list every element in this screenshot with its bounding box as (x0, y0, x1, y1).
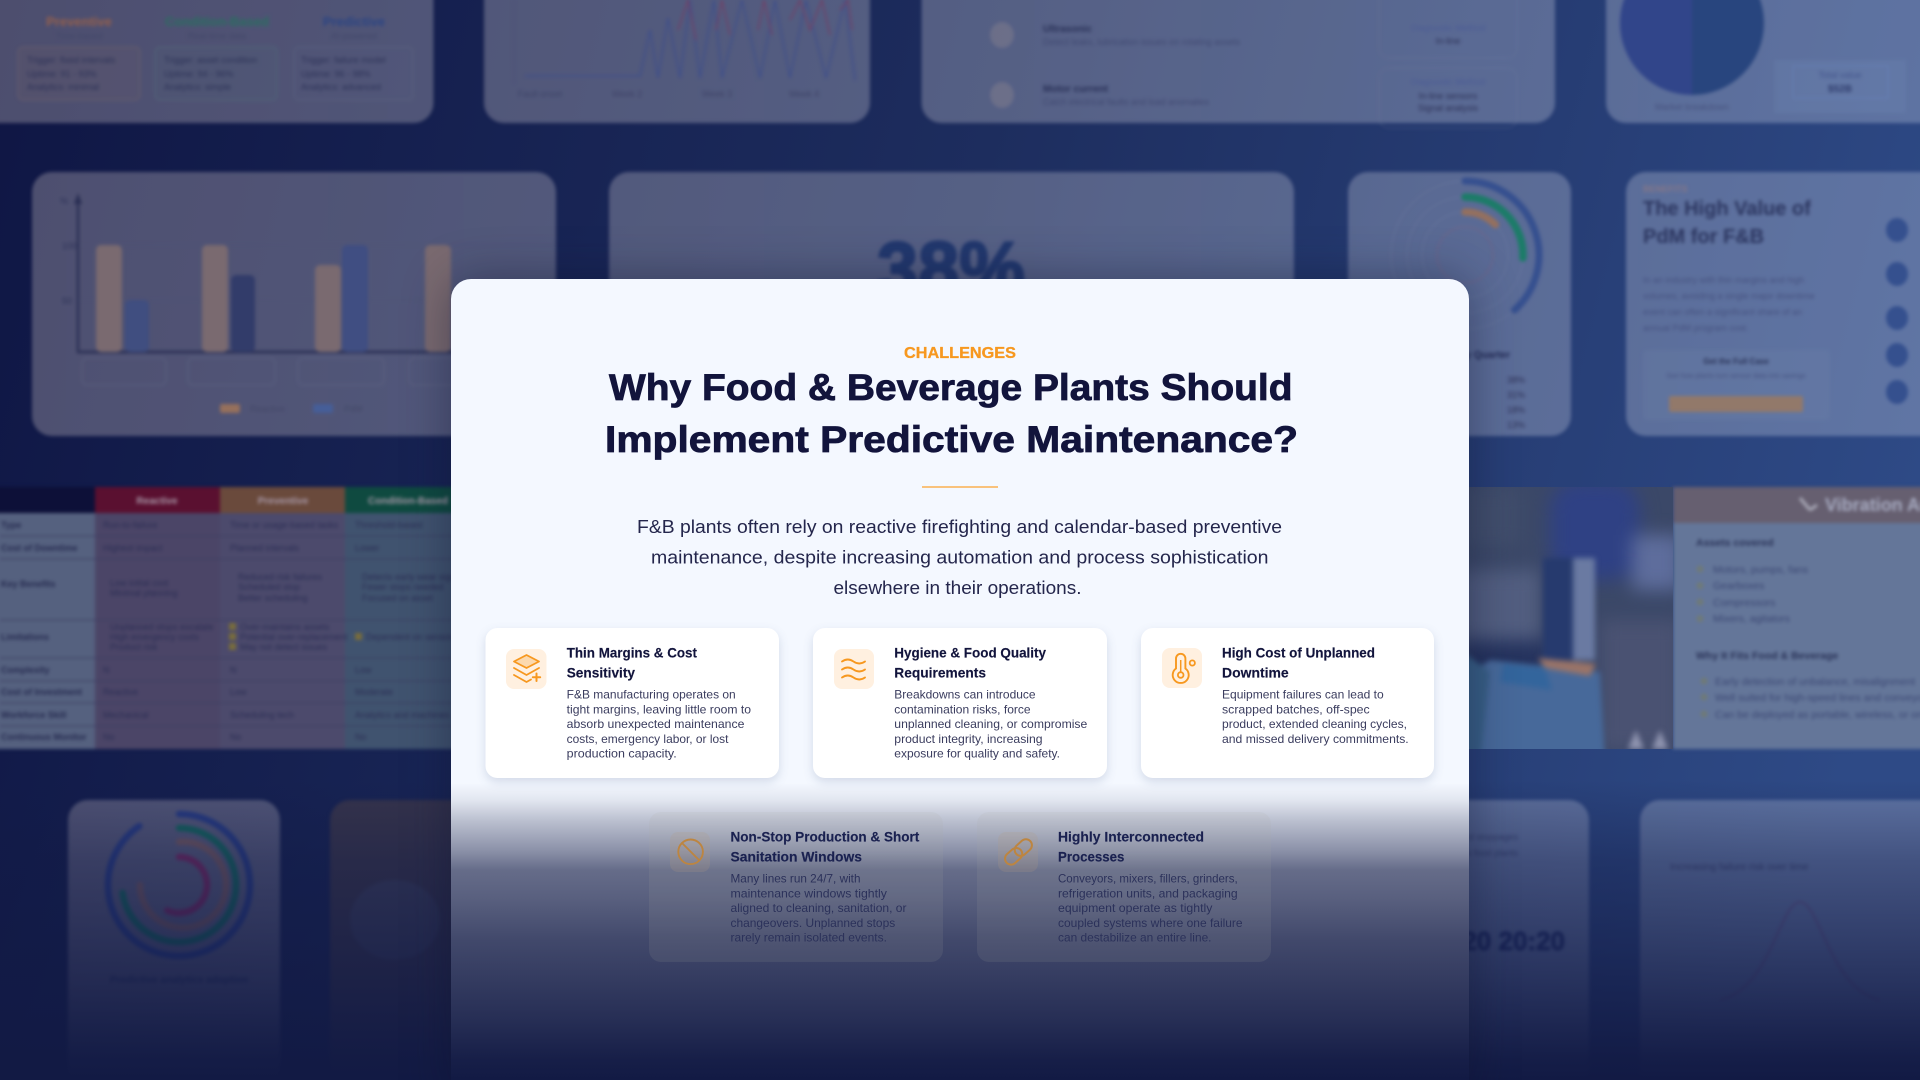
panel: maintenance strategies: Real-time data (188, 31, 246, 41)
card: thin margins: absorb unexpected maintenance (567, 717, 745, 731)
panel: timers: across food plants (1445, 848, 1518, 858)
card: non-stop production: changeovers. Unplanned stops (730, 916, 895, 930)
section eyebrow: CHALLENGES (904, 345, 1016, 362)
panel: high value of PdM: event can often a significant share of an (1643, 307, 1802, 317)
card: interconnected processes: coupled systems where one failure (1058, 916, 1243, 930)
panel: comparison table: Mechanical (103, 710, 149, 720)
panel: blurred photo of technician (1469, 487, 1673, 749)
panel: pie chart: Market breakdown (1655, 102, 1729, 112)
card: non-stop production: Sanitation Windows (730, 848, 862, 864)
panel: comparison table: May not detect issues (240, 642, 328, 652)
card: thin margins: production capacity. (567, 746, 677, 760)
panel: comparison table: No (103, 732, 115, 742)
card: thin margins: F&B manufacturing operates on (567, 688, 736, 702)
panel: bar chart (32, 172, 556, 436)
panel: maintenance strategies: Analytics: minimal (27, 82, 99, 92)
panel: maintenance strategies: Time-based (55, 31, 103, 41)
panel: techniques list: Diagnostic Method (1411, 77, 1485, 87)
panel: bar chart: 50 (62, 296, 72, 306)
panel: pie chart: $52B (1828, 84, 1852, 95)
main heading: Why Food & Beverage Plants Should (609, 367, 1292, 408)
panel: comparison table: Fewer stops needed (362, 582, 444, 592)
panel: comparison table: Analytics and machines (355, 710, 450, 720)
heading divider (922, 486, 998, 488)
panel: bar chart: 100 (62, 241, 77, 251)
panel: comparison table: Dependent on sensors (366, 632, 457, 642)
panel: pie chart: Total value (1818, 70, 1862, 80)
panel: timers: 20:20 20:20 (1425, 926, 1565, 956)
panel: sensor line chart: Week 4 (789, 89, 819, 99)
panel: techniques list: In-line (1436, 36, 1460, 46)
card: interconnected processes: Processes (1058, 848, 1125, 864)
panel: maintenance strategies: Uptime: 91 - 93% (27, 69, 97, 79)
panel: maintenance strategies: Preventive (46, 14, 112, 29)
panel: comparison table: Low (355, 665, 372, 675)
panel: radial chart: 18% (1507, 405, 1525, 415)
card: interconnected processes: equipment operate as tightly (1058, 901, 1212, 915)
card: hygiene: product integrity, increasing (894, 732, 1043, 746)
icon: layers (506, 649, 546, 689)
icon: waves (834, 649, 874, 689)
icon: thermometer (1162, 648, 1202, 688)
panel: comparison table: Continuous Monitor (1, 732, 87, 742)
card: hygiene: Requirements (894, 664, 986, 680)
panel: pie chart (1606, 0, 1920, 123)
panel: blurred photo, lower left (330, 800, 470, 1080)
card: non-stop production: rarely remain isolated events. (730, 930, 887, 944)
panel: maintenance strategies: Trigger: asset condition (164, 55, 257, 65)
panel: timers (1400, 800, 1589, 1080)
card: thin margins: tight margins, leaving little room to (567, 702, 751, 716)
card: hygiene: Hygiene & Food Quality (894, 645, 1046, 661)
panel: comparison table: Detects early wear signals (362, 572, 468, 582)
panel: comparison table: Limitations (1, 632, 49, 642)
panel: high value of PdM: BENEFITS (1643, 184, 1688, 194)
panel: comparison table: High emergency costs (110, 632, 200, 642)
card: non-stop production (649, 812, 943, 962)
panel: comparison table (0, 487, 468, 749)
panel: comparison table: Unplanned stops escalate (110, 622, 214, 632)
panel: high value of PdM: In an industry with thin margins and high (1643, 275, 1804, 285)
panel: sensor line chart: Week 3 (702, 89, 732, 99)
card: downtime cost: High Cost of Unplanned (1222, 645, 1375, 661)
card: downtime cost: and missed delivery commitments. (1222, 732, 1409, 746)
panel: techniques list: Motor current (1043, 84, 1109, 95)
panel: maintenance strategies: Uptime: 94 - 96% (164, 69, 234, 79)
intro paragraph: maintenance, despite increasing automation and process sophistication (651, 546, 1268, 568)
card: non-stop production: Non-Stop Production & Short (730, 829, 920, 845)
panel: 38% stat: 38% (877, 227, 1025, 312)
panel: techniques list: Signal analysis (1418, 103, 1479, 113)
card: thin margins (486, 628, 779, 778)
card: downtime cost: Downtime (1222, 664, 1289, 680)
panel: comparison table: Lower (355, 543, 380, 553)
panel: comparison table: Planned intervals (230, 543, 300, 553)
card: thin margins: Thin Margins & Cost (567, 645, 697, 661)
panel: comparison table: Minimal planning (110, 588, 178, 598)
panel: comparison table: Time or usage-based tasks (230, 520, 339, 530)
intro paragraph: F&B plants often rely on reactive firefighting and calendar-based preventive (637, 516, 1282, 537)
panel: comparison table: N (230, 665, 236, 675)
panel: radial gauge: Predictive analytics adoption (110, 975, 248, 986)
panel: challenges modal (451, 279, 1469, 1080)
panel: comparison table: No (355, 732, 367, 742)
panel: comparison table: Key Benefits (1, 579, 56, 589)
panel: bar chart: PdM (344, 404, 363, 414)
panel: techniques list: Ultrasonic (1043, 24, 1092, 35)
card: downtime cost: Equipment failures can lead to (1222, 688, 1384, 702)
panel: maintenance strategies: Trigger: failure model (301, 55, 386, 65)
panel: maintenance strategies: Predictive (323, 14, 385, 29)
panel: radial chart (1348, 172, 1571, 436)
panel: high value of PdM: volumes, avoiding a single major downtime (1643, 291, 1815, 301)
panel: comparison table: Cost of Downtime (1, 543, 78, 553)
card: hygiene: Breakdowns can introduce (894, 688, 1036, 702)
panel: comparison table: Over-maintains assets (240, 622, 330, 632)
panel: comparison table: Preventive (258, 496, 309, 507)
panel: techniques list: Detect leaks, lubrication issues on rotating assets (1043, 37, 1241, 47)
card: interconnected processes: refrigeration units, and packaging (1058, 886, 1238, 900)
card: thin margins: Sensitivity (567, 664, 635, 680)
panel: bar chart: Reactive (250, 404, 285, 414)
panel: comparison table: No (230, 732, 242, 742)
card: hygiene: exposure for quality and safety. (894, 746, 1060, 760)
panel: bar chart: % (60, 196, 68, 206)
icon: prohibited (670, 832, 710, 872)
panel: vibration analysis: Mixers, agitators (1713, 613, 1790, 625)
panel: comparison table: Cost of Investment (1, 687, 82, 697)
panel: comparison table: Type (1, 520, 21, 530)
panel: maintenance strategies: AI-powered (331, 31, 377, 41)
card: thin margins: costs, emergency labor, or lost (567, 732, 729, 746)
card: hygiene: unplanned cleaning, or compromise (894, 717, 1088, 731)
panel: comparison table: Scheduling tech (230, 710, 294, 720)
panel: comparison table: Reduced risk failures (238, 572, 323, 582)
panel: high value of PdM: See how plants turn sensor data into savings (1666, 373, 1806, 380)
panel: radial chart: by Quarter (1459, 350, 1510, 361)
panel: bell curve: Increasing failure risk over time (1670, 862, 1809, 873)
modal fade overlay (451, 783, 1469, 1080)
panel: high value of PdM: Get the Full Case (1703, 357, 1769, 366)
panel: comparison table: Better scheduling (238, 593, 308, 603)
panel: high value of PdM: The High Value of (1643, 198, 1811, 220)
panel: vibration analysis: Assets covered (1696, 537, 1774, 549)
panel: comparison table: Condition-Based (368, 496, 448, 507)
panel: comparison table: Complexity (1, 665, 50, 675)
panel: comparison table: Low (230, 687, 247, 697)
panel: comparison table: Run-to-failure (103, 520, 158, 530)
panel: radial chart: 31% (1507, 390, 1525, 400)
panel: techniques list: Diagnostic Method (1411, 23, 1485, 33)
card: downtime cost (1141, 628, 1434, 778)
panel: vibration analysis: Motors, pumps, fans (1713, 564, 1808, 576)
panel: vibration analysis (1673, 487, 1920, 749)
panel: maintenance strategies: Trigger: fixed intervals (27, 55, 116, 65)
panel: maintenance strategies: Analytics: advanced (301, 82, 381, 92)
panel: vibration analysis: Gearboxes (1713, 580, 1764, 592)
panel: maintenance strategies: Analytics: simple (164, 82, 231, 92)
panel: 38% stat (609, 172, 1294, 436)
panel: comparison table: Workforce Skill (1, 710, 66, 720)
panel: maintenance strategies: Condition-Based (165, 14, 269, 29)
panel: high value of PdM: annual PdM program cost. (1643, 323, 1749, 333)
panel: techniques list: In-line sensors (1419, 91, 1478, 101)
panel: comparison table: Moderate (355, 687, 393, 697)
panel: maintenance strategies: Uptime: 96 - 98% (301, 69, 371, 79)
card: interconnected processes: can destabilize an entire line. (1058, 930, 1212, 944)
intro paragraph (637, 516, 1282, 598)
panel: timers: Unplanned stoppages (1430, 832, 1518, 842)
panel: radial gauge (68, 800, 280, 1080)
panel: comparison table: N (103, 665, 110, 675)
panel: techniques list (922, 0, 1555, 128)
card: non-stop production: maintenance windows tightly (730, 886, 887, 900)
panel: bell curve (1640, 800, 1920, 1080)
modal surface (451, 279, 1469, 1080)
main heading: Implement Predictive Maintenance? (605, 419, 1298, 460)
panel: maintenance strategies (0, 0, 434, 123)
card: interconnected processes: Conveyors, mixers, fillers, grinders, (1058, 872, 1238, 886)
background fade overlay (0, 770, 1920, 1080)
panel: sensor line chart: Fault onset (518, 89, 563, 99)
card: hygiene (813, 628, 1107, 778)
panel: techniques list: Catch electrical faults and load anomalies (1043, 97, 1210, 107)
card: non-stop production: Many lines run 24/7, with (730, 872, 860, 886)
card: interconnected processes (977, 812, 1271, 962)
panel: high value of PdM: PdM for F&B (1643, 226, 1764, 248)
panel: vibration analysis: Early detection of unbalance, misalignment (1715, 676, 1915, 688)
panel: vibration analysis: Compressors (1713, 597, 1775, 609)
panel: vibration analysis: Why It Fits Food & Beverage (1696, 650, 1839, 662)
panel: comparison table: Scheduled stop (238, 582, 300, 592)
main heading (605, 367, 1298, 460)
panel: comparison table: Product risk (110, 642, 158, 652)
panel: high value of PdM (1626, 172, 1920, 436)
intro paragraph: elsewhere in their operations. (834, 577, 1082, 598)
panel: radial chart: 38% (1507, 375, 1525, 385)
card: downtime cost: product, extended cleaning cycles, (1222, 717, 1407, 731)
panel: comparison table: Focused on asset (362, 593, 434, 603)
panel: sensor line chart: Week 2 (612, 89, 642, 99)
icon: chain link (998, 832, 1038, 872)
panel: comparison table: Low initial cost (110, 578, 169, 588)
panel: comparison table: Reactive (136, 496, 178, 507)
panel: comparison table: Reactive (103, 687, 138, 697)
panel: comparison table: Highest impact (103, 543, 163, 553)
card: interconnected processes: Highly Interconnected (1058, 829, 1204, 845)
panel: radial chart: 13% (1507, 420, 1525, 430)
card: hygiene: contamination risks, force (894, 702, 1031, 716)
card: downtime cost: scrapped batches, off-spec (1222, 702, 1370, 716)
panel: comparison table: Threshold-based (355, 520, 423, 530)
panel: comparison table: Potential over-replacement (240, 632, 348, 642)
card: non-stop production: aligned to cleaning, sanitation, or (730, 901, 907, 915)
panel: sensor line chart (484, 0, 870, 123)
